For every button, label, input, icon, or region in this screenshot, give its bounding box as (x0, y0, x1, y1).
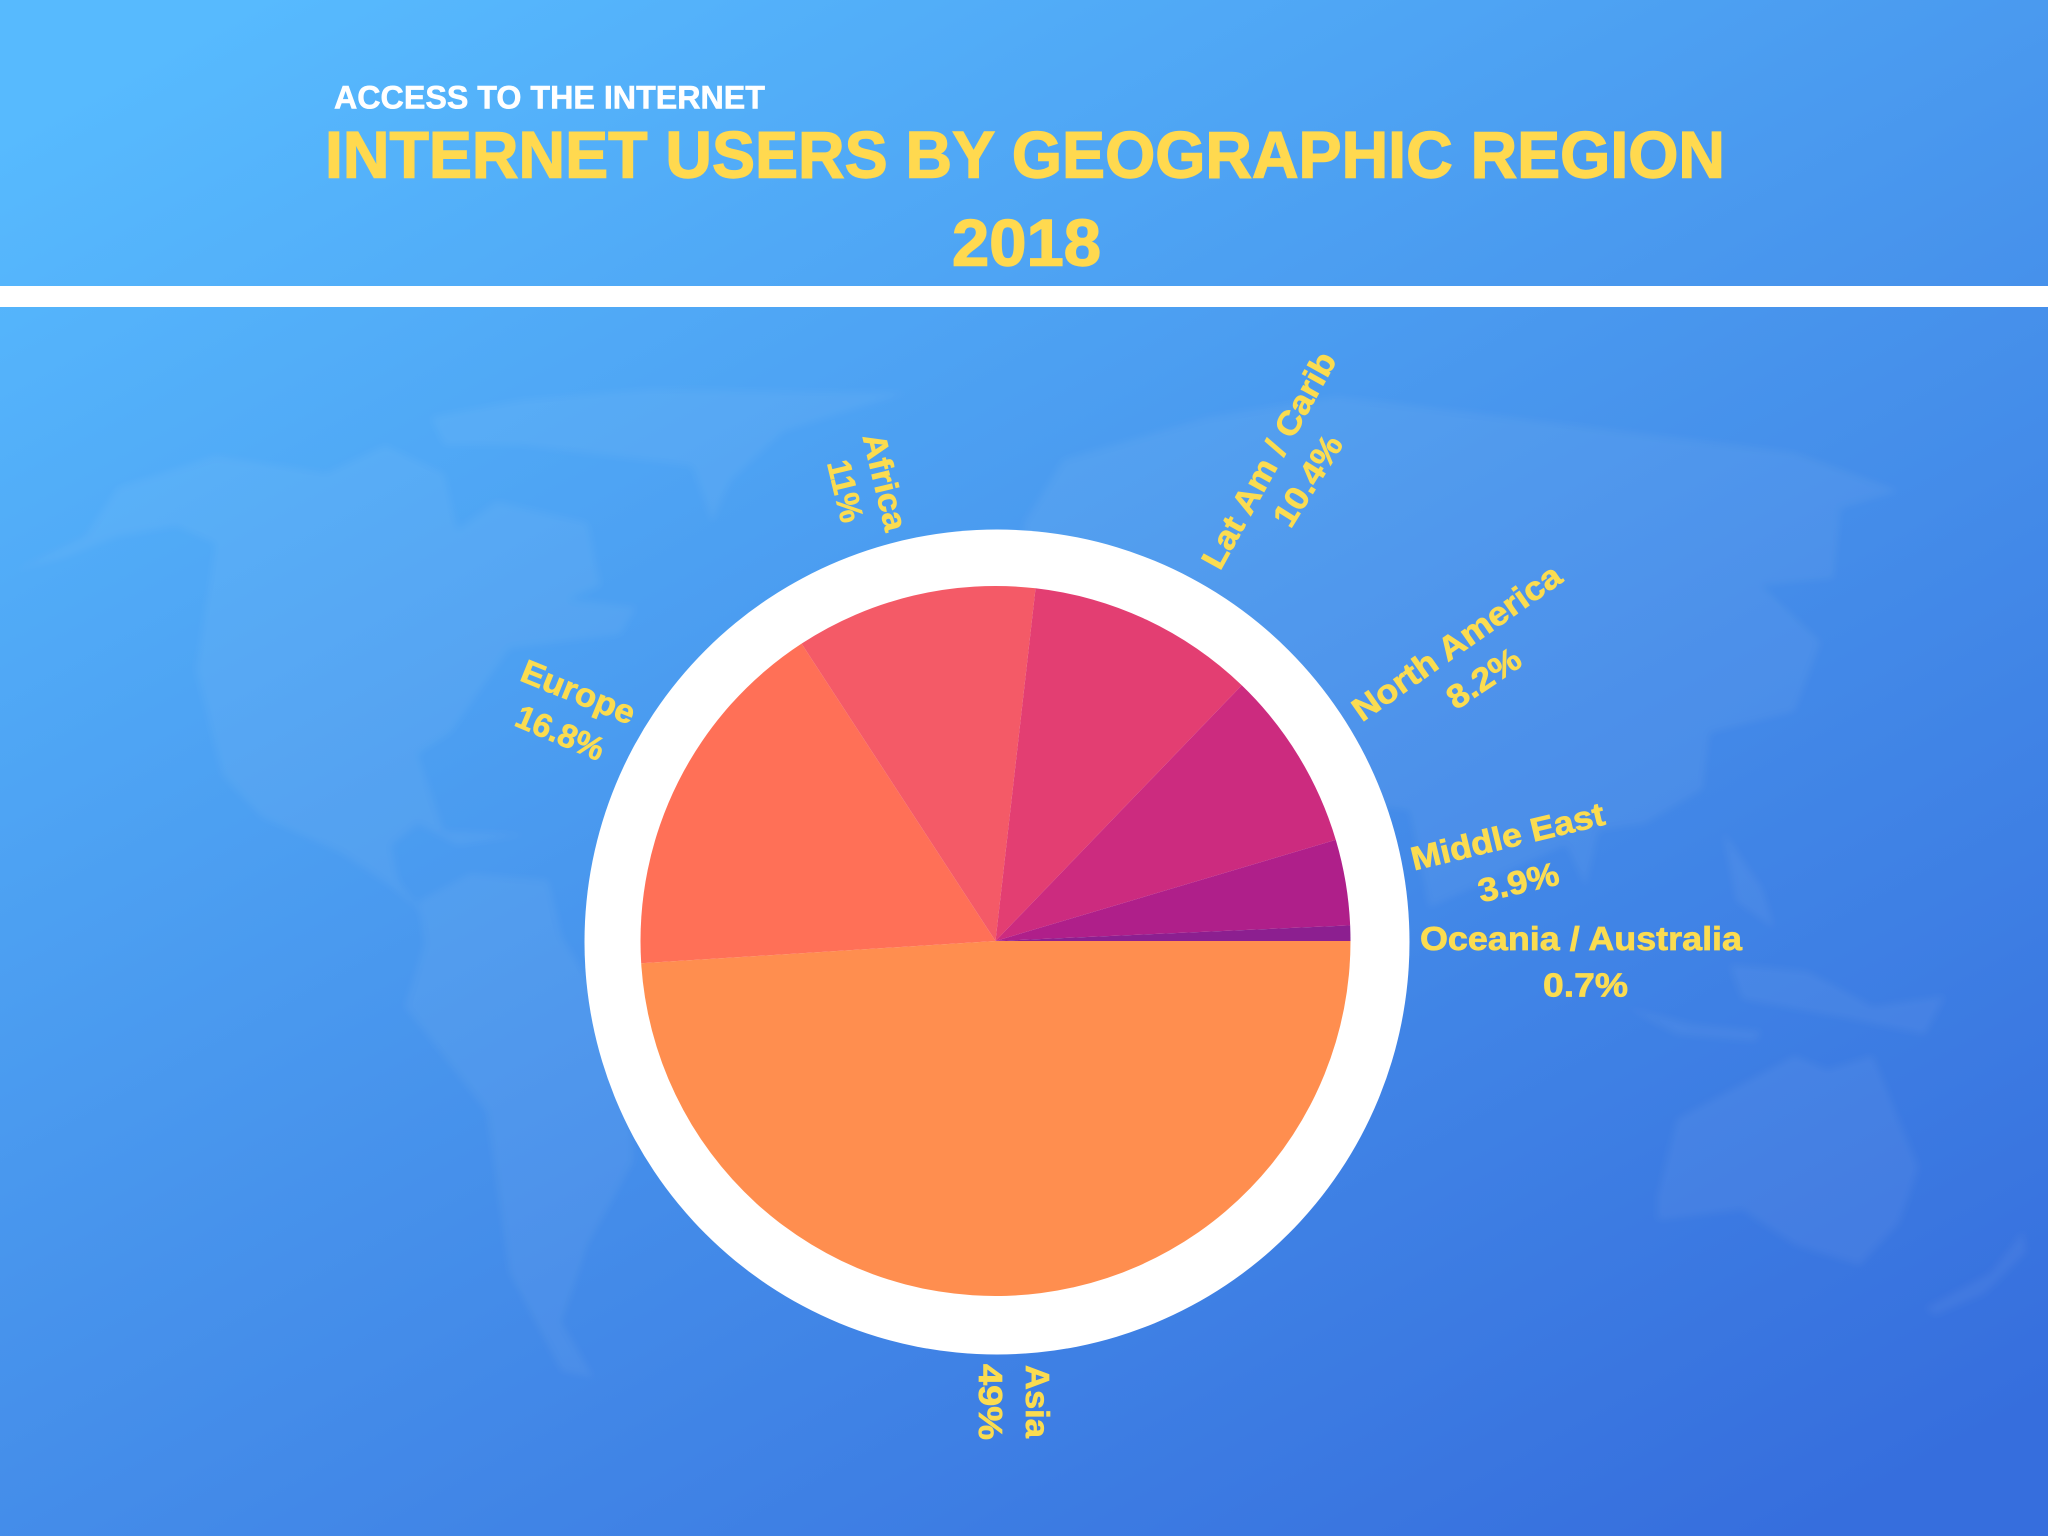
label: Middle East: 3.9% (1474, 855, 1562, 909)
label: Asia: Asia (1019, 1365, 1056, 1439)
label: Middle East (1407, 795, 1608, 909)
eyebrow heading: ACCESS TO THE INTERNET (334, 80, 765, 116)
label: Middle East: Middle East (1407, 795, 1608, 877)
slice: Lat Am / Carib 10.4% (996, 588, 1242, 941)
slice: Africa 11% (802, 586, 1036, 941)
pie white ring (584, 530, 1410, 1354)
label: Africa (820, 429, 915, 535)
label: Lat Am / Carib: 10.4% (1265, 428, 1350, 533)
label: Asia (972, 1364, 1056, 1440)
label: Oceania / Australia: Oceania / Australia (1420, 920, 1743, 957)
label: Lat Am / Carib: Lat Am / Carib (1194, 345, 1343, 575)
label: North America: 8.2% (1439, 640, 1528, 716)
title: INTERNET USERS BY GEOGRAPHIC REGION (325, 118, 1725, 192)
header divider bar (0, 286, 2048, 307)
label: Europe: 16.8% (510, 697, 610, 768)
title year: 2018 (952, 206, 1101, 280)
label: Oceania / Australia: 0.7% (1543, 966, 1628, 1004)
pie chart (584, 530, 1410, 1354)
slice: Middle East 3.9% (996, 840, 1350, 941)
label: North America: North America (1345, 556, 1569, 728)
slice: Oceania / Australia 0.7% (996, 925, 1350, 941)
slice: Asia 49% (641, 941, 1350, 1296)
label: Oceania / Australia (1420, 920, 1743, 1004)
label: Europe: Europe (516, 652, 641, 731)
slice: North America 8.2% (996, 685, 1336, 941)
label: Africa: 11% (820, 456, 871, 526)
slice: Europe 16.8% (640, 644, 996, 963)
world map watermark (13, 389, 2027, 1378)
label: Africa: Africa (856, 429, 915, 535)
label: Europe (510, 652, 641, 768)
label: Asia: 49% (972, 1364, 1009, 1440)
